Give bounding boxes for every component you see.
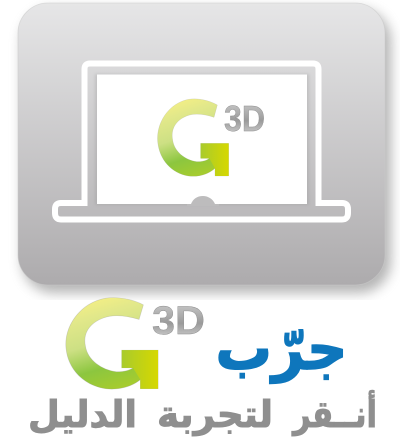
text: click to try the guide — [28, 390, 377, 436]
icon: green G large — [66, 298, 158, 389]
text: 3D large: 3D — [152, 299, 205, 343]
logo: G3D on screen — [158, 98, 265, 176]
text: click to try the guide: الدليل — [28, 393, 137, 436]
text: try heading: جرّب — [216, 314, 348, 384]
text: click to try the guide: أنــقر — [291, 390, 377, 436]
icon: laptop — [55, 64, 348, 220]
text: click to try the guide: لتجربة — [157, 393, 273, 436]
icon: green G — [158, 99, 229, 176]
text: 3D: 3D — [224, 98, 265, 139]
logo: G3D large — [66, 298, 205, 389]
